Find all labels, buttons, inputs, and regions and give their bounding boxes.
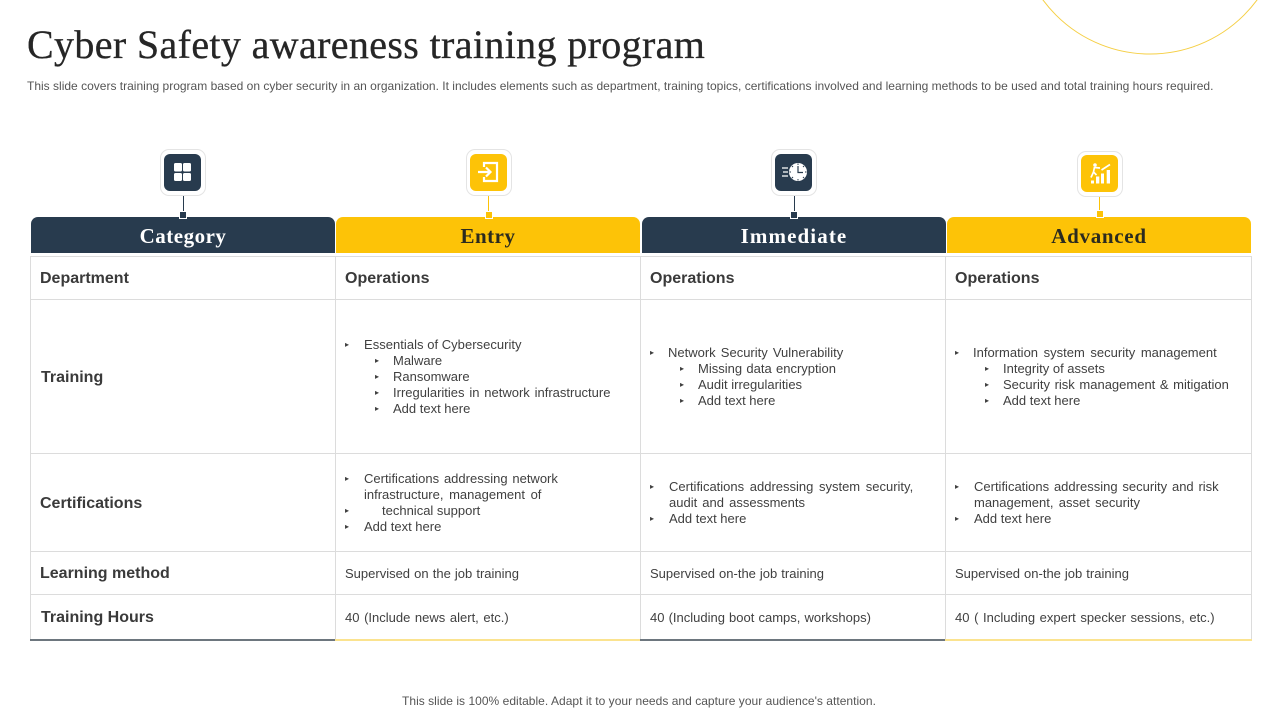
training: entry: ▸ xyxy=(375,356,379,365)
header: Advanced xyxy=(947,217,1251,253)
training: advanced: ▸ xyxy=(985,380,989,389)
department values: Operations xyxy=(650,270,734,287)
row label: Learning method: Learning method xyxy=(40,565,170,582)
training: entry: Add text here xyxy=(393,401,470,416)
training: immediate: ▸ xyxy=(650,348,654,357)
department values xyxy=(345,270,1039,287)
certifications: entry: Add text here xyxy=(364,519,441,534)
certifications: entry: ▸ xyxy=(345,474,349,483)
certifications: advanced: Certifications addressing security and risk xyxy=(974,479,1219,494)
header: Category: Category xyxy=(140,224,226,248)
icon: advanced growth xyxy=(1077,151,1123,218)
subtitle: This slide covers training program based on cyber security in an organization. It includes elements such as department, training topics, certifications involved and learning methods to be used and total training hours required. xyxy=(27,79,1213,93)
training: advanced: Add text here xyxy=(1003,393,1080,408)
training: advanced: Information system security management xyxy=(973,345,1217,360)
certifications: immediate: Add text here xyxy=(669,511,746,526)
certifications: advanced: Add text here xyxy=(974,511,1051,526)
learning method values: Supervised on-the job training xyxy=(955,566,1129,581)
certifications: immediate xyxy=(650,479,913,526)
learning method values: Supervised on the job training xyxy=(345,566,519,581)
training: entry: ▸ xyxy=(375,372,379,381)
training: immediate: Audit irregularities xyxy=(698,377,802,392)
training: entry: Essentials of Cybersecurity xyxy=(364,337,522,352)
training: immediate: ▸ xyxy=(680,396,684,405)
certifications: entry: ▸ xyxy=(345,506,349,515)
training: immediate: Add text here xyxy=(698,393,775,408)
training: entry: ▸ xyxy=(375,404,379,413)
training hours values: 40 ( Including expert specker sessions, etc.) xyxy=(955,610,1215,625)
training: immediate: Network Security Vulnerability xyxy=(668,345,843,360)
training: entry: Malware xyxy=(393,353,442,368)
certifications: immediate: audit and assessments xyxy=(669,495,805,510)
training: immediate: ▸ xyxy=(680,380,684,389)
training: entry xyxy=(345,337,610,416)
certifications: advanced: management, asset security xyxy=(974,495,1140,510)
training hours values xyxy=(345,610,1215,625)
training: immediate: ▸ xyxy=(680,364,684,373)
title: Cyber Safety awareness training program xyxy=(27,22,705,67)
icon: category grid xyxy=(160,149,206,219)
department values: Operations xyxy=(955,270,1039,287)
training: advanced: ▸ xyxy=(955,348,959,357)
certifications: entry: Certifications addressing network xyxy=(364,471,558,486)
row label: Training Hours: Training Hours xyxy=(41,609,154,626)
training: advanced: ▸ xyxy=(985,364,989,373)
header: Immediate xyxy=(642,217,946,253)
icon: entry sign-in xyxy=(466,149,512,219)
header: Entry: Entry xyxy=(460,224,516,248)
certifications: advanced: ▸ xyxy=(955,514,959,523)
learning method values: Supervised on-the job training xyxy=(650,566,824,581)
certifications: advanced xyxy=(955,479,1219,526)
certifications: advanced: ▸ xyxy=(955,482,959,491)
row label: Certifications: Certifications xyxy=(40,495,142,512)
training hours values: 40 (Include news alert, etc.) xyxy=(345,610,509,625)
training: entry: ▸ xyxy=(345,340,349,349)
training: entry: Ransomware xyxy=(393,369,470,384)
department values: Operations xyxy=(345,270,429,287)
training: entry: ▸ xyxy=(375,388,379,397)
certifications: entry: technical support xyxy=(382,503,480,518)
training: immediate: Missing data encryption xyxy=(698,361,836,376)
header: Immediate: Immediate xyxy=(741,224,847,248)
training: advanced xyxy=(955,345,1229,408)
row label: Training: Training xyxy=(41,369,103,386)
training: advanced: Security risk management & mitigation xyxy=(1003,377,1229,392)
certifications: entry xyxy=(345,471,558,534)
header: Entry xyxy=(336,217,640,253)
header: Category xyxy=(31,217,335,253)
footer note: This slide is 100% editable. Adapt it to your needs and capture your audience's attention. xyxy=(402,694,876,708)
training hours values: 40 (Including boot camps, workshops) xyxy=(650,610,871,625)
decorative circle arc xyxy=(1042,0,1258,54)
certifications: entry: infrastructure, management of xyxy=(364,487,541,502)
learning method values xyxy=(345,566,1129,581)
certifications: immediate: ▸ xyxy=(650,482,654,491)
certifications: immediate: Certifications addressing system security, xyxy=(669,479,913,494)
certifications: entry: ▸ xyxy=(345,522,349,531)
training: advanced: Integrity of assets xyxy=(1003,361,1105,376)
certifications: immediate: ▸ xyxy=(650,514,654,523)
header: Advanced: Advanced xyxy=(1051,224,1147,248)
training: entry: Irregularities in network infrastructure xyxy=(393,385,610,400)
training: advanced: ▸ xyxy=(985,396,989,405)
icon: immediate clock xyxy=(771,149,817,219)
training: immediate xyxy=(650,345,844,408)
row label: Department: Department xyxy=(40,270,129,287)
